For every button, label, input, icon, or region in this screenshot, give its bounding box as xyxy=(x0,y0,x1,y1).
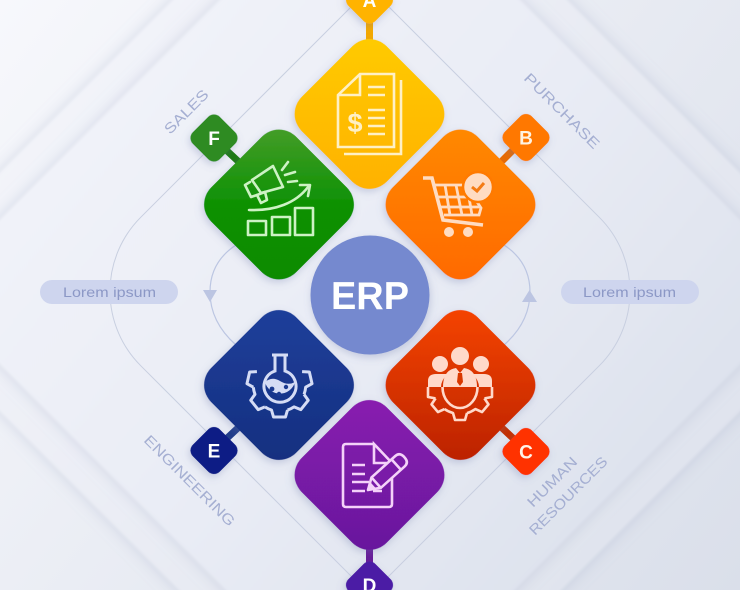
panel B: orange purchase xyxy=(376,120,545,289)
badge B: B xyxy=(519,128,533,150)
inner loop arrow: left xyxy=(203,245,236,345)
pill: right Lorem ipsum xyxy=(561,280,699,304)
icon: flask in gear xyxy=(245,355,314,417)
icon: people and gear xyxy=(428,347,492,420)
badge D xyxy=(343,558,396,590)
pill: left Lorem ipsum xyxy=(40,280,178,304)
panel D: purple document xyxy=(285,390,454,560)
icon: megaphone and rising bars xyxy=(245,162,313,235)
badge E: E xyxy=(208,442,220,462)
center circle: ERP: ERP xyxy=(331,275,409,318)
badge A xyxy=(343,0,396,27)
label: human resources: HUMAN xyxy=(525,454,581,511)
badge B xyxy=(499,111,553,164)
label: sales: SALES xyxy=(162,87,212,138)
panel F: green sales xyxy=(194,120,364,289)
center circle: ERP xyxy=(310,236,430,354)
connector stems xyxy=(224,18,516,568)
icon: shopping cart with check xyxy=(423,172,493,237)
badge F: F xyxy=(208,129,220,150)
panel A: yellow invoice xyxy=(285,29,454,199)
label: purchase: PURCHASE xyxy=(520,71,602,153)
icon: invoice document xyxy=(338,74,401,154)
panel E: navy engineering xyxy=(194,300,364,470)
icon: invoice document: $ xyxy=(347,108,363,138)
badge C xyxy=(499,425,553,478)
badge C: C xyxy=(519,442,533,464)
outer guide line xyxy=(110,0,630,590)
pill: left Lorem ipsum: Lorem ipsum xyxy=(63,284,156,300)
label: human resources: RESOURCES xyxy=(527,454,611,539)
badge F xyxy=(187,111,241,165)
icon: document with pencil xyxy=(343,444,409,507)
pill: right Lorem ipsum: Lorem ipsum xyxy=(583,284,676,300)
panel C: red human resources xyxy=(376,300,545,470)
badge E xyxy=(187,424,241,477)
inner loop arrow: right xyxy=(504,245,537,345)
label: engineering: ENGINEERING xyxy=(140,433,238,530)
